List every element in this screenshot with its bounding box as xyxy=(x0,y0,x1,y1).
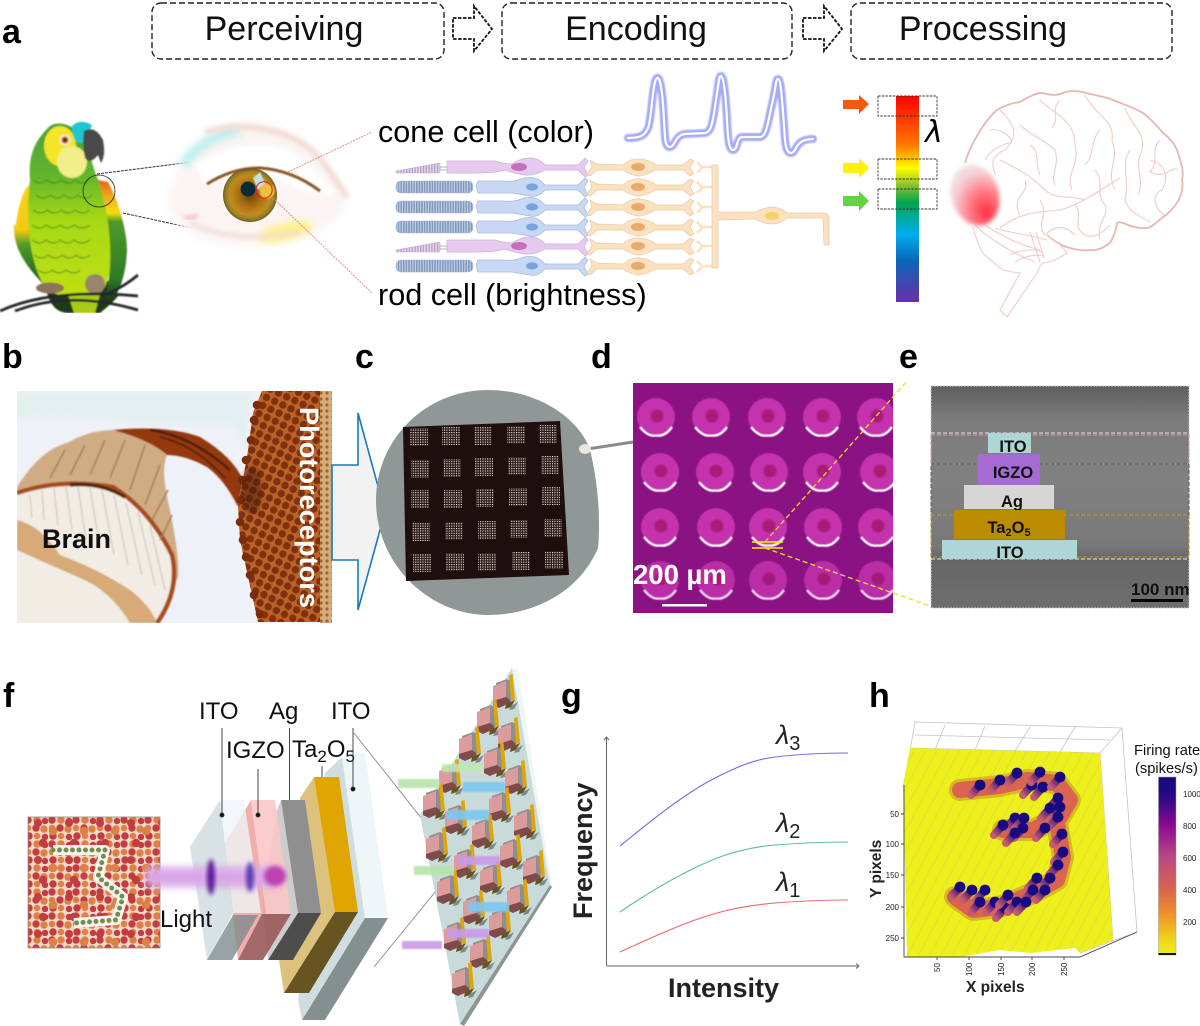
panel label g: g xyxy=(561,677,582,715)
panel e: layer stack cross-section xyxy=(899,338,1190,608)
panel label e: e xyxy=(899,338,918,376)
text: scale 200 um: 200 µm xyxy=(633,559,727,590)
text: lambda 2: λ xyxy=(776,808,789,838)
callout: red circle on retina xyxy=(256,182,272,198)
text: colorbar title xyxy=(1134,743,1200,777)
text: layer labels: Ta xyxy=(292,736,317,763)
layer: Ta2O5 xyxy=(279,777,358,993)
panel c: wafer photograph xyxy=(355,338,633,615)
colorbar labels: 400 xyxy=(1183,886,1197,895)
text: layer labels: 5 xyxy=(346,747,355,766)
panel b: insect brain photograph xyxy=(2,338,332,623)
arrow: green xyxy=(843,191,869,211)
panel a: perceiving, encoding, processing pipeline xyxy=(0,3,1183,317)
text: cone cell label: cone cell (color) xyxy=(378,115,594,149)
colorbar labels: 200 xyxy=(1183,918,1197,927)
device array on plate xyxy=(420,668,552,1026)
connector: dashed lines from d to e xyxy=(765,380,930,606)
text: layer labels xyxy=(199,698,371,766)
text: lambda 1: λ xyxy=(776,867,789,897)
leader lines xyxy=(220,728,449,967)
Ishihara test plate xyxy=(28,817,160,948)
callout lines: parrot to eye xyxy=(97,156,239,237)
panel label a: a xyxy=(2,13,22,51)
colorbar labels xyxy=(1183,790,1200,927)
callout lines: eye to cell labels xyxy=(273,132,372,293)
layer: Ta2O5: Ta xyxy=(987,519,1005,537)
layer: Ta2O5: 2 xyxy=(1005,527,1012,539)
illustration: parrot xyxy=(0,122,138,313)
illustration: spike train xyxy=(628,76,813,153)
text: layer labels: Ag xyxy=(269,698,298,725)
arrow: insect eye to device xyxy=(332,413,385,610)
text: lambda 1: 1 xyxy=(789,880,800,902)
scale bar xyxy=(662,604,707,606)
text: layer labels: ITO xyxy=(199,698,239,725)
highlight: red visual cortex region xyxy=(943,158,1007,232)
curve: lambda 3 xyxy=(620,753,848,846)
step box: Processing xyxy=(851,3,1172,59)
x tick labels xyxy=(933,962,1069,976)
illustration: retina cell network xyxy=(396,158,829,276)
text: y axis label: Frequency xyxy=(568,782,598,919)
layer: Ag xyxy=(262,800,321,960)
layer: Ta2O5: 5 xyxy=(1024,527,1031,539)
tweezer xyxy=(579,442,633,454)
chip with 5x5 device arrays xyxy=(403,421,569,581)
text: lambda 3: 3 xyxy=(789,733,800,755)
cell rows: cones, rods and bipolar cells xyxy=(396,158,712,276)
text: layer labels: IGZO xyxy=(226,737,285,764)
curve: lambda 1 xyxy=(620,900,848,952)
layer: ITO top xyxy=(988,433,1031,456)
yellow firing surface xyxy=(903,748,1113,957)
step box: Encoding: Encoding xyxy=(565,10,707,48)
panel label c: c xyxy=(355,338,374,376)
x tick labels: 250 xyxy=(1060,962,1069,976)
step box: Processing: Processing xyxy=(899,10,1067,48)
panel g: frequency vs intensity chart xyxy=(561,677,859,1003)
plot axes xyxy=(901,785,1137,960)
x tick labels: 100 xyxy=(965,962,974,976)
text: layer labels: O xyxy=(327,736,346,763)
SEM background xyxy=(931,386,1189,608)
y tick labels: 150 xyxy=(886,871,900,880)
layer: Ag xyxy=(964,485,1054,511)
layer: ITO front electrode xyxy=(190,800,261,960)
illustration: human brain xyxy=(965,91,1183,317)
y tick labels xyxy=(886,810,900,943)
y tick labels: 250 xyxy=(886,934,900,943)
magenta micrograph xyxy=(633,383,898,613)
layer: ITO top: ITO xyxy=(999,438,1027,456)
panel label f: f xyxy=(3,677,15,715)
text: Brain: Brain xyxy=(42,524,111,554)
light beam xyxy=(146,859,286,895)
text: X pixels: X pixels xyxy=(966,979,1025,996)
layer: Ta2O5: O xyxy=(1012,519,1025,537)
y tick labels: 200 xyxy=(886,903,900,912)
panel label b: b xyxy=(2,338,23,376)
panel d: device array micrograph xyxy=(591,338,898,613)
dashed selection boxes xyxy=(878,96,937,209)
arrow: encoding to processing xyxy=(803,6,842,51)
text: colorbar title: Firing rate xyxy=(1134,743,1200,759)
y tick labels: 50 xyxy=(890,810,900,819)
ganglion cell with axon xyxy=(712,165,829,268)
illustration: wavelength color bar xyxy=(843,95,943,302)
text: colorbar title: (spikes/s) xyxy=(1135,761,1198,777)
arrow: yellow xyxy=(843,158,869,178)
step box: Perceiving: Perceiving xyxy=(205,10,363,48)
arrow: perceiving to encoding xyxy=(453,6,492,51)
panel h: firing rate 3D map xyxy=(868,677,1200,996)
panel label h: h xyxy=(869,677,890,715)
micrograph xyxy=(17,391,332,623)
illustration: human eye xyxy=(168,122,347,247)
text: lambda 3: λ xyxy=(776,720,789,750)
y tick labels: 100 xyxy=(886,840,900,849)
layer: IGZO: IGZO xyxy=(993,464,1033,482)
colorbar labels: 800 xyxy=(1183,822,1197,831)
x tick labels: 150 xyxy=(997,962,1006,976)
layer: ITO bottom xyxy=(942,540,1077,562)
x tick labels: 50 xyxy=(933,963,942,972)
text: scale 100 nm: 100 nm xyxy=(1131,580,1190,599)
panel f: device schematic with color-blind test input xyxy=(3,668,552,1026)
layer: ITO bottom: ITO xyxy=(996,544,1024,562)
step box: Encoding xyxy=(502,3,792,59)
text: Light: Light xyxy=(160,906,212,933)
wafer disc xyxy=(376,390,599,615)
text: layer labels: ITO xyxy=(331,698,371,725)
axes xyxy=(604,737,859,968)
text: rod cell label: rod cell (brightness) xyxy=(378,278,647,312)
layer: Ag: Ag xyxy=(1001,493,1023,511)
x tick labels: 200 xyxy=(1028,962,1037,976)
layer: ITO back electrode xyxy=(298,752,388,1020)
text: Y pixels: Y pixels xyxy=(868,840,885,898)
digit 3 response xyxy=(951,767,1070,918)
colorbar xyxy=(1158,777,1176,955)
dashed interface boxes xyxy=(931,433,1189,559)
scale bar xyxy=(1131,599,1183,602)
text: layer labels: 2 xyxy=(317,747,327,766)
3D plot box xyxy=(904,722,1137,953)
curve: lambda 2 xyxy=(620,842,848,912)
panel label d: d xyxy=(591,338,612,376)
yellow section markers xyxy=(752,542,783,548)
layer: IGZO xyxy=(978,454,1040,485)
callout: circle on parrot eye region xyxy=(83,175,115,207)
text: lambda 2: 2 xyxy=(789,821,800,843)
layer: Ta2O5 xyxy=(954,510,1065,539)
layer: IGZO xyxy=(225,800,291,960)
colored light beams on array xyxy=(398,764,509,949)
spectrum bar xyxy=(896,96,919,302)
arrow: orange xyxy=(843,95,869,114)
text: x axis label: Intensity xyxy=(668,973,779,1003)
colorbar labels: 600 xyxy=(1183,854,1197,863)
step box: Perceiving xyxy=(152,3,444,59)
text: Photoreceptors: Photoreceptors xyxy=(294,407,324,608)
text: lambda: λ xyxy=(923,115,943,150)
